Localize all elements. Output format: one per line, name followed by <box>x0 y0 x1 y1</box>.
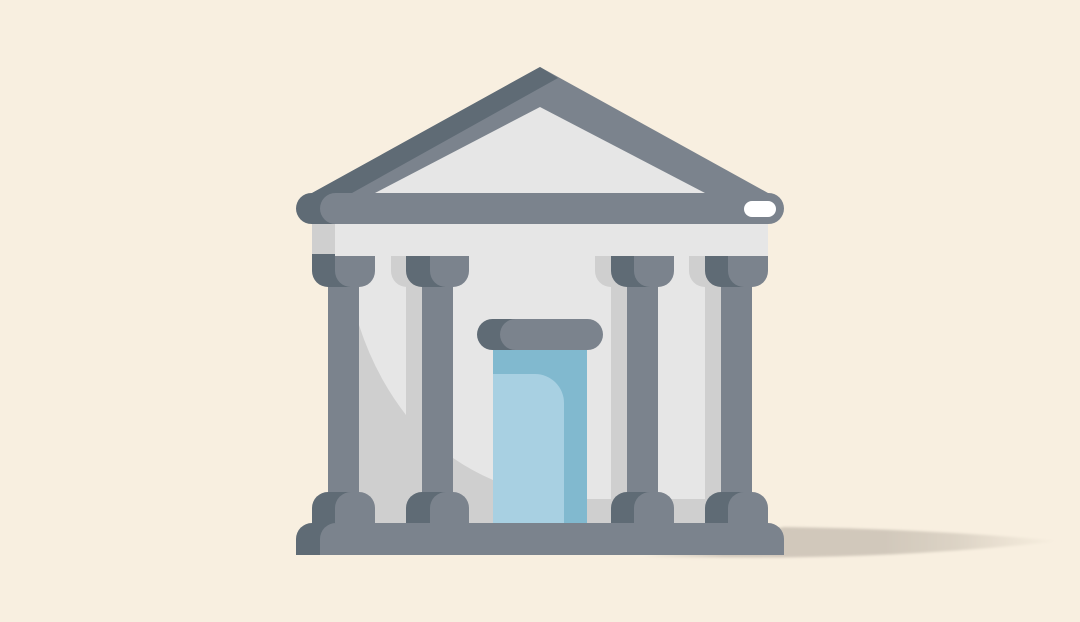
column 4 <box>705 256 768 523</box>
entablature beam <box>296 193 784 224</box>
base platform <box>296 523 784 555</box>
wall <box>312 224 768 523</box>
ground shadow <box>640 527 1060 558</box>
door <box>477 319 603 523</box>
column 2 <box>406 256 469 523</box>
beam highlight <box>744 201 776 217</box>
roof pediment <box>312 67 768 200</box>
door lintel <box>477 319 537 350</box>
column 1 <box>312 254 375 523</box>
column 3 <box>611 256 674 523</box>
